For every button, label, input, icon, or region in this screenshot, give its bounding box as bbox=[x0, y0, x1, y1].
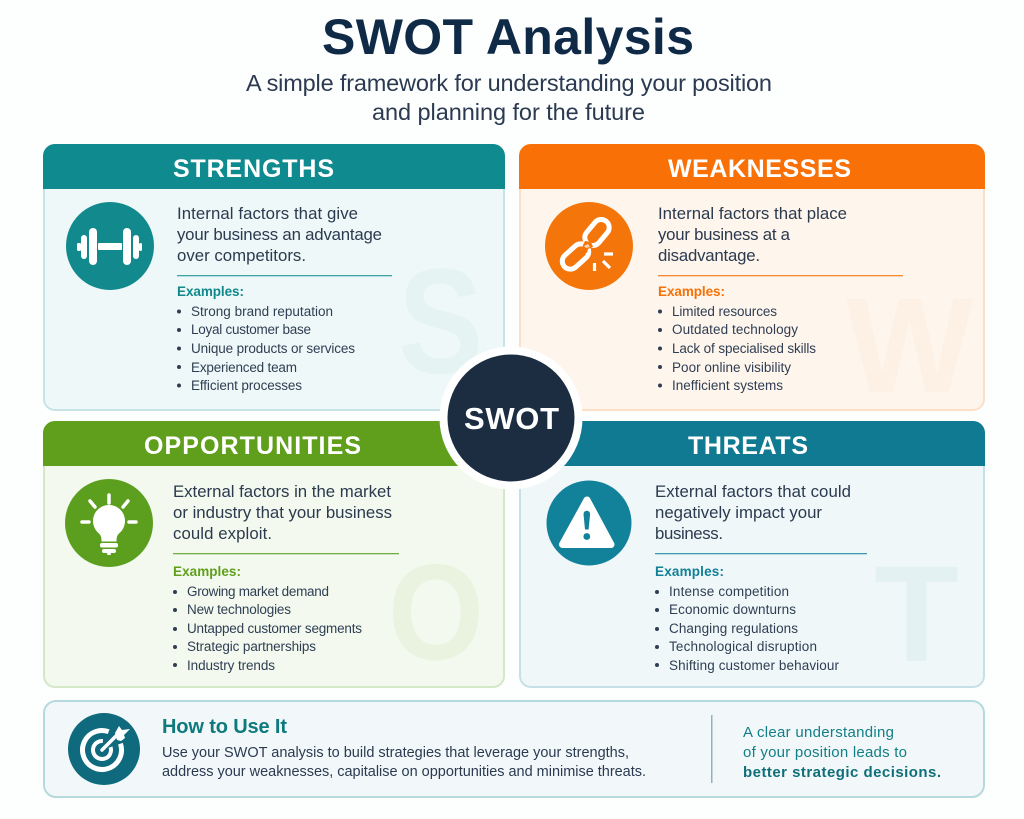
icon: light bulb bbox=[65, 479, 153, 567]
strengths examples: Experienced team bbox=[191, 360, 297, 375]
opportunities examples: Growing market demand bbox=[187, 584, 329, 599]
takeaway callout: of your position leads to bbox=[743, 744, 907, 761]
strengths examples: Examples: bbox=[177, 284, 244, 299]
threats header: THREATS bbox=[688, 432, 808, 460]
threats examples: Economic downturns bbox=[669, 602, 796, 617]
threats examples: Technological disruption bbox=[669, 639, 817, 654]
icon: broken chain link bbox=[545, 202, 633, 290]
subtitle bbox=[246, 70, 772, 125]
panel: strengths bbox=[43, 144, 505, 410]
center SWOT badge: SWOT bbox=[464, 401, 559, 436]
subtitle: and planning for the future bbox=[372, 99, 645, 125]
weaknesses description bbox=[658, 204, 847, 265]
opportunities examples: Examples: bbox=[173, 564, 241, 579]
strengths description bbox=[177, 204, 382, 265]
takeaway callout: A clear understanding bbox=[743, 724, 894, 741]
weaknesses examples: Outdated technology bbox=[672, 322, 798, 337]
threats examples: Intense competition bbox=[669, 584, 789, 599]
weaknesses examples: Limited resources bbox=[672, 304, 777, 319]
strengths description: Internal factors that give bbox=[177, 204, 358, 223]
strengths examples: Loyal customer base bbox=[191, 322, 311, 337]
icon: dumbbell bbox=[66, 202, 154, 290]
strengths examples: Unique products or services bbox=[191, 341, 355, 356]
opportunities examples bbox=[173, 564, 362, 673]
opportunities header: OPPORTUNITIES bbox=[144, 432, 361, 460]
how to use it text bbox=[162, 716, 646, 780]
icon: warning triangle bbox=[546, 480, 632, 566]
subtitle: A simple framework for understanding your position bbox=[246, 70, 772, 96]
strengths examples: Strong brand reputation bbox=[191, 304, 333, 319]
weaknesses examples: Poor online visibility bbox=[672, 360, 791, 375]
center SWOT badge bbox=[440, 346, 582, 490]
opportunities description: could exploit. bbox=[173, 524, 272, 543]
opportunities description bbox=[173, 482, 392, 543]
weaknesses description: Internal factors that place bbox=[658, 204, 847, 223]
watermark letter O: O bbox=[388, 536, 484, 688]
panel: opportunities bbox=[43, 421, 505, 688]
weaknesses description: disadvantage. bbox=[658, 246, 760, 265]
threats examples bbox=[655, 564, 840, 673]
opportunities examples: Untapped customer segments bbox=[187, 621, 362, 636]
panel: threats bbox=[519, 421, 985, 691]
strengths description: your business an advantage bbox=[177, 225, 382, 244]
opportunities examples: New technologies bbox=[187, 602, 291, 617]
how to use it text: address your weaknesses, capitalise on opportunities and minimise threats. bbox=[162, 764, 646, 780]
takeaway callout: better strategic decisions. bbox=[743, 764, 941, 781]
opportunities header bbox=[43, 421, 505, 466]
strengths header bbox=[43, 144, 505, 189]
weaknesses examples: Lack of specialised skills bbox=[672, 341, 816, 356]
weaknesses examples: Inefficient systems bbox=[672, 378, 783, 393]
strengths description: over competitors. bbox=[177, 246, 306, 265]
strengths examples bbox=[177, 284, 355, 393]
title: SWOT Analysis bbox=[322, 9, 694, 65]
threats examples: Examples: bbox=[655, 564, 724, 579]
weaknesses header bbox=[519, 144, 985, 189]
weaknesses description: your business at a bbox=[658, 225, 791, 244]
watermark letter S: S bbox=[398, 237, 483, 405]
opportunities examples: Industry trends bbox=[187, 658, 275, 673]
takeaway callout bbox=[743, 724, 941, 781]
how to use it text: How to Use It bbox=[162, 716, 287, 738]
watermark letter T: T bbox=[874, 538, 959, 691]
weaknesses examples: Examples: bbox=[658, 284, 725, 299]
threats description: negatively impact your bbox=[655, 503, 822, 522]
strengths examples: Efficient processes bbox=[191, 378, 302, 393]
opportunities description: or industry that your business bbox=[173, 503, 392, 522]
threats description bbox=[655, 482, 851, 543]
watermark letter W: W bbox=[846, 270, 974, 421]
weaknesses header: WEAKNESSES bbox=[668, 155, 851, 183]
opportunities description: External factors in the market bbox=[173, 482, 391, 501]
strengths header: STRENGTHS bbox=[173, 155, 334, 183]
opportunities examples: Strategic partnerships bbox=[187, 639, 316, 654]
icon: target with arrow bbox=[68, 713, 140, 785]
threats examples: Changing regulations bbox=[669, 621, 798, 636]
threats description: External factors that could bbox=[655, 482, 851, 501]
weaknesses examples bbox=[658, 284, 816, 393]
threats header bbox=[519, 421, 985, 466]
panel: how to use it bbox=[44, 701, 984, 797]
threats description: business. bbox=[655, 524, 723, 543]
panel: weaknesses bbox=[519, 144, 985, 421]
how to use it text: Use your SWOT analysis to build strategies that leverage your strengths, bbox=[162, 745, 629, 761]
threats examples: Shifting customer behaviour bbox=[669, 658, 840, 673]
